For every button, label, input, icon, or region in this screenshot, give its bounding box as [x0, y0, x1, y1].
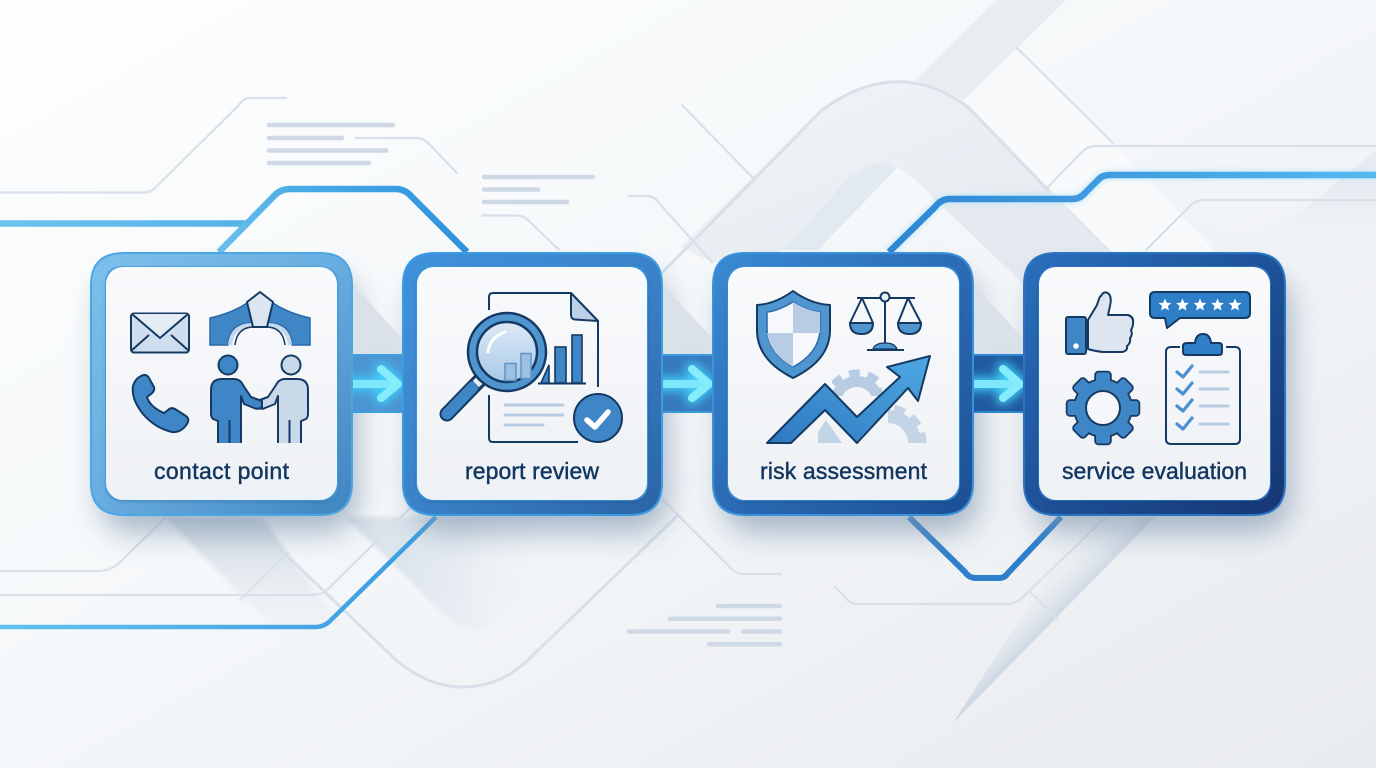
panel: service evaluation — [1024, 253, 1285, 515]
icon: settings gear — [1068, 372, 1138, 444]
connector 3 to 4 — [959, 355, 1031, 412]
icon: thumbs up — [1066, 292, 1133, 354]
arrow 1 — [337, 369, 398, 398]
icon: envelope — [131, 314, 189, 352]
panel: report review — [403, 253, 662, 515]
text lines — [505, 405, 563, 425]
icon: background gears — [818, 370, 926, 443]
panel: risk assessment — [713, 253, 973, 515]
icon: checklist clipboard — [1166, 334, 1240, 444]
bar chart — [538, 335, 586, 384]
card frame — [403, 253, 662, 515]
card frame — [713, 253, 973, 515]
check badge — [574, 394, 622, 442]
connector 2 to 3 — [647, 355, 720, 412]
blue connector circuit lines — [0, 175, 1376, 627]
icon: balance scales — [850, 292, 921, 350]
label: report review — [465, 458, 599, 484]
connector 1 to 2 — [337, 355, 410, 412]
panel: contact point — [91, 253, 352, 515]
decorative text lines — [269, 125, 780, 644]
icon: report with magnifier — [447, 293, 622, 442]
document outline — [489, 293, 598, 442]
magnifier handle — [447, 379, 481, 414]
icon: telephone — [133, 375, 188, 432]
card face — [106, 267, 337, 500]
icon: shield — [757, 291, 830, 378]
arrow 2 — [647, 369, 709, 398]
label: contact point — [154, 458, 290, 484]
magnifier lens — [468, 313, 546, 391]
card drop shadows — [100, 275, 1291, 533]
icon: five star rating bubble — [1150, 292, 1250, 328]
card frame — [91, 253, 352, 515]
card face — [728, 267, 959, 500]
label: service evaluation — [1062, 458, 1247, 484]
card face — [417, 267, 647, 500]
card face — [1039, 267, 1270, 500]
diagonal card shadows — [350, 282, 1023, 356]
icon: rising zigzag arrow — [767, 356, 930, 443]
icon: gateway arch — [210, 292, 310, 345]
label: risk assessment — [760, 458, 928, 484]
card frame — [1024, 253, 1285, 515]
icon: handshake people — [211, 356, 308, 443]
arrow 3 — [959, 369, 1020, 398]
